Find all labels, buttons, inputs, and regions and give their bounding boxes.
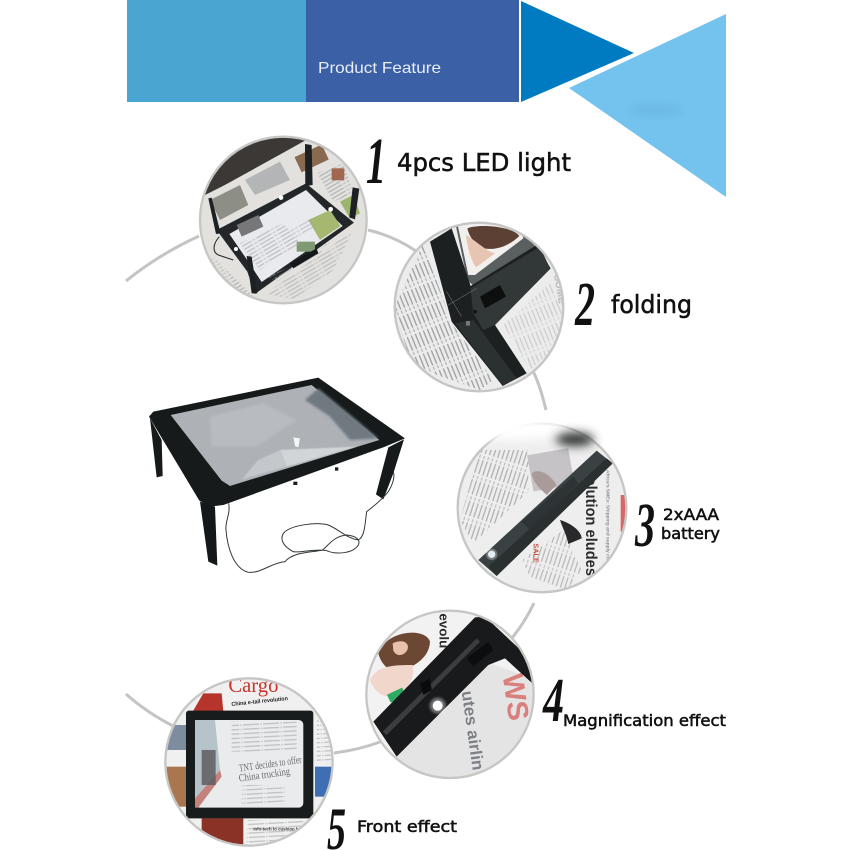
label 2: 2 [574,271,595,339]
frame [149,378,405,507]
headline: olution eludes [582,477,599,576]
folding frame [430,228,551,386]
photo 4: magnification circle: utes airlin [458,690,488,771]
photo 3: battery circle [457,419,630,597]
label 1: 4pcs LED light [397,148,571,177]
light blue triangle [569,14,726,197]
frame edge [373,617,537,757]
label 4: Magnification effect [563,711,726,730]
lens text [504,284,562,368]
label 1: 1 [366,125,386,198]
photo 1: LED light circle [197,133,370,307]
lens [195,720,303,808]
upper lens with woman photo [456,226,536,285]
legs [150,418,163,477]
photo 2: folding circle: SOME [551,274,567,305]
photo 3: battery circle: Africa's SMEs: Shipping and supply chain [606,470,611,567]
label 5: Front effect [357,817,457,836]
photo 5: front view circle: China trucking [238,766,291,785]
photo 4: magnification circle: WS [496,671,535,723]
connecting arc [126,230,546,753]
frame edge [478,451,613,576]
product photo: magnifier on legs [149,378,405,572]
power cord [226,472,394,572]
label 2: folding [611,290,692,319]
blurred smudge [457,419,594,446]
label 3 [634,492,720,560]
label 2 [574,271,692,339]
legs [208,198,221,234]
frame [217,183,354,294]
label 3: 2xAAA [663,505,719,524]
photo 3: battery circle: SALE [531,543,540,563]
label 4 [542,667,726,735]
label 5 [327,796,457,850]
label 4: 4 [542,667,564,735]
frame [186,711,313,818]
photo 5: front view circle [163,675,337,850]
lens newspaper [397,663,537,780]
label 3: battery [661,524,720,543]
dark blue triangle [521,1,634,102]
banner title: Product Feature [318,60,441,77]
lens headline: TNT decides to offer [238,755,303,775]
photo 5: front view circle: Info-tech to cushion box blow [253,827,315,832]
photo 2: folding circle [393,222,567,395]
lens [171,385,379,486]
label 1 [366,125,571,198]
lens [229,190,343,282]
photo 5: front view circle: China e-tail revolution [231,696,289,708]
header banner [127,0,519,102]
label 3: 3 [634,492,655,560]
Cargo masthead: Cargo [228,675,278,697]
photo 4: magnification circle: evolu [436,613,450,648]
photo 4: magnification circle [365,610,537,780]
woman photo [378,633,430,672]
